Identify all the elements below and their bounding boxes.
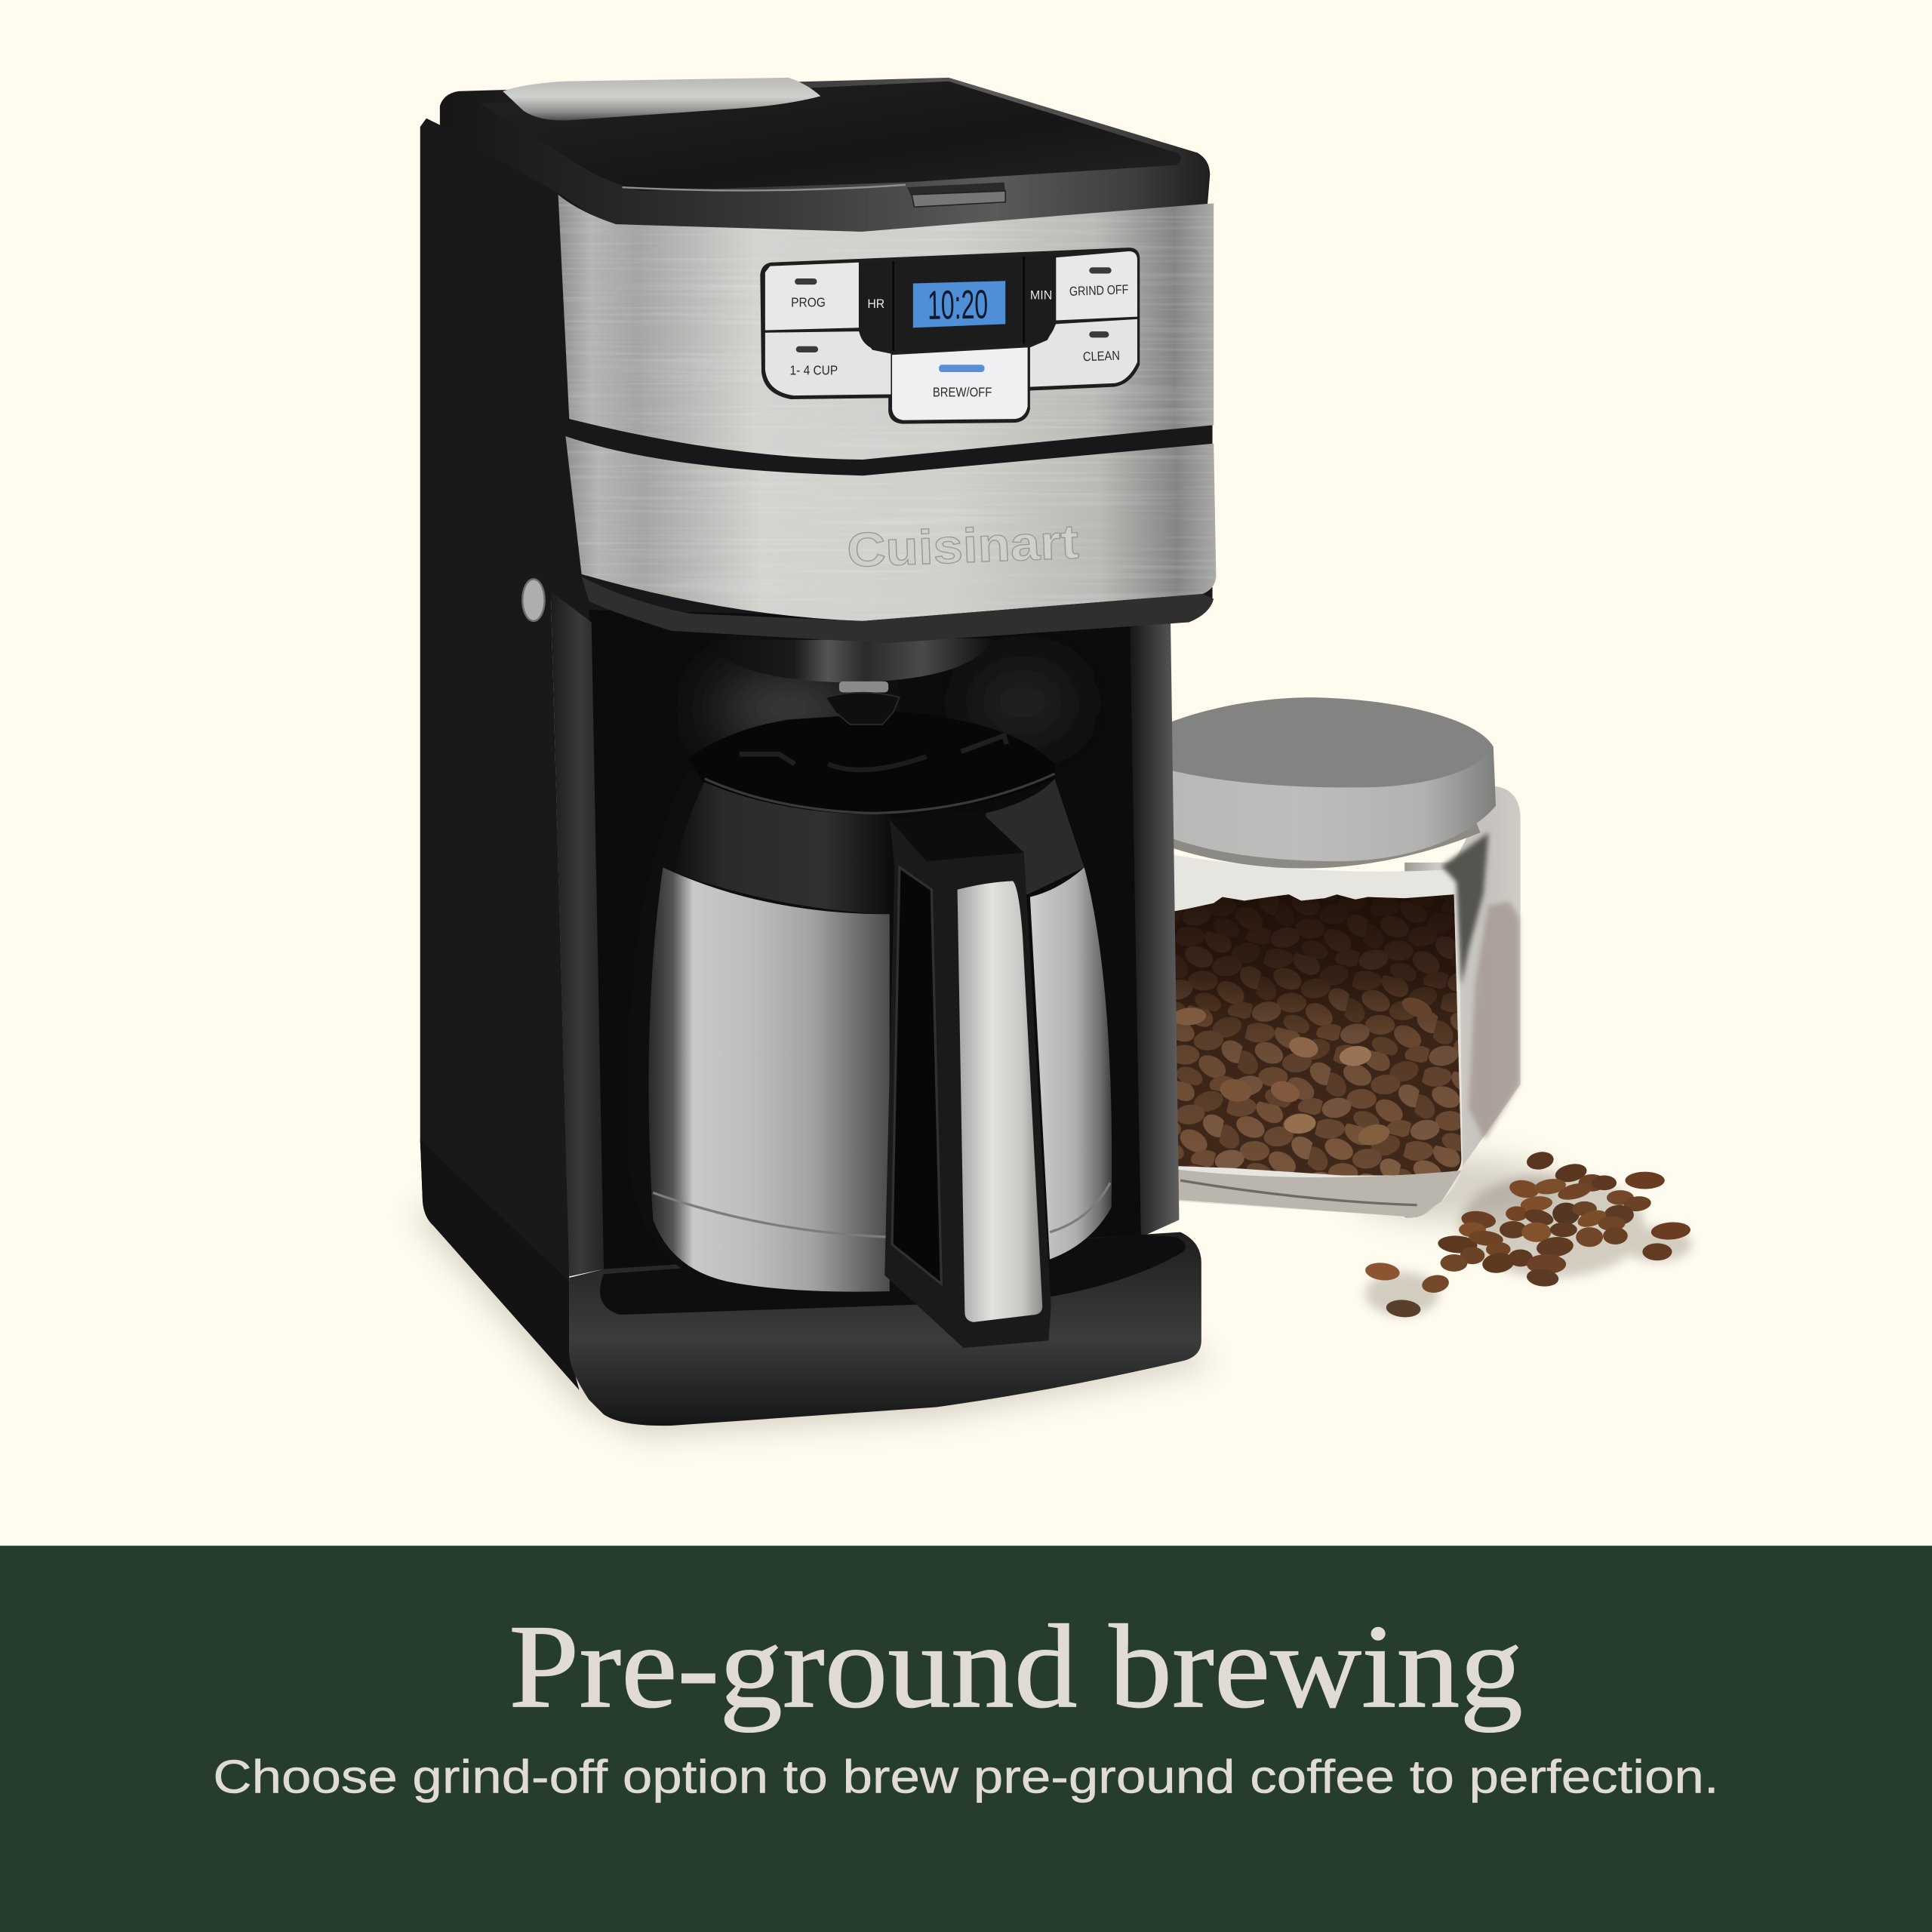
display housing (859, 255, 1056, 352)
CLEAN button: CLEAN (1083, 348, 1120, 364)
handle window (892, 867, 941, 1284)
shadow beneath coffee maker (413, 1201, 1214, 1435)
lower rim (582, 577, 1214, 643)
glass front face (1158, 853, 1463, 1217)
drip valve (826, 681, 900, 724)
carafe body shadow (627, 770, 888, 1291)
jar floor glass (1164, 1168, 1461, 1217)
side button (522, 579, 545, 621)
MIN label: MIN (1030, 289, 1052, 303)
lid latch (907, 183, 1005, 207)
BREW/OFF button: BREW/OFF (933, 385, 992, 400)
Cuisinart logo: Cuisinart (846, 515, 1080, 577)
LCD screen: 10:20 (928, 281, 989, 328)
glass jar (1158, 697, 1521, 1218)
lid top (481, 82, 1181, 191)
subheading: Choose grind-off option to brew pre-ground coffee to perfection. (213, 1752, 1719, 1804)
side panel (420, 118, 579, 1390)
GRIND OFF button: GRIND OFF (1069, 281, 1129, 299)
left column (551, 592, 604, 1276)
CLEAN button (1030, 319, 1137, 387)
brushed texture (555, 191, 1220, 625)
caption band (0, 1546, 1932, 1932)
BREW/OFF button (892, 347, 1028, 420)
upper steel band (558, 195, 1214, 460)
head backing (549, 183, 1213, 647)
brewing chamber (589, 610, 1143, 1281)
jar neck ring (1164, 828, 1478, 863)
lid top (1164, 697, 1494, 787)
dark reflection at jar corner (1441, 833, 1488, 986)
jar shadow (1349, 1157, 1558, 1221)
control panel (760, 248, 1140, 424)
rim highlight (622, 185, 906, 190)
PROG button (765, 263, 859, 331)
brew basket (709, 638, 993, 682)
panel outline (760, 248, 1140, 424)
PROG button: PROG (791, 295, 826, 310)
side panel lower edge (420, 1140, 579, 1390)
reflected beans on side (1469, 902, 1519, 1140)
LCD screen (913, 281, 1005, 328)
beans inside (1164, 894, 1461, 1176)
carafe steel left (648, 867, 890, 1292)
1-4 CUP button: 1- 4 CUP (790, 362, 838, 377)
1-4 CUP button (765, 331, 891, 395)
right column (1130, 620, 1179, 1237)
carafe (627, 711, 1112, 1348)
HR label: HR (867, 297, 884, 311)
handle steel plate (958, 881, 1042, 1322)
carafe base ring (653, 1183, 1110, 1237)
hopper window (503, 78, 820, 120)
carafe lid (688, 711, 1055, 814)
lid skirt (1164, 746, 1496, 861)
GRIND OFF button (1056, 251, 1137, 320)
carafe steel right (1030, 867, 1112, 1260)
handle (884, 811, 1051, 1348)
lower steel band (565, 436, 1216, 621)
base tray (569, 1232, 1201, 1426)
heading: Pre-ground brewing (509, 1601, 1523, 1733)
lid rim (440, 78, 1210, 232)
loose beans (1364, 1150, 1692, 1318)
carafe upper band (674, 777, 1087, 914)
chamber glow (715, 672, 1072, 743)
coffee maker (420, 78, 1220, 1426)
glass side face (1404, 786, 1521, 1218)
